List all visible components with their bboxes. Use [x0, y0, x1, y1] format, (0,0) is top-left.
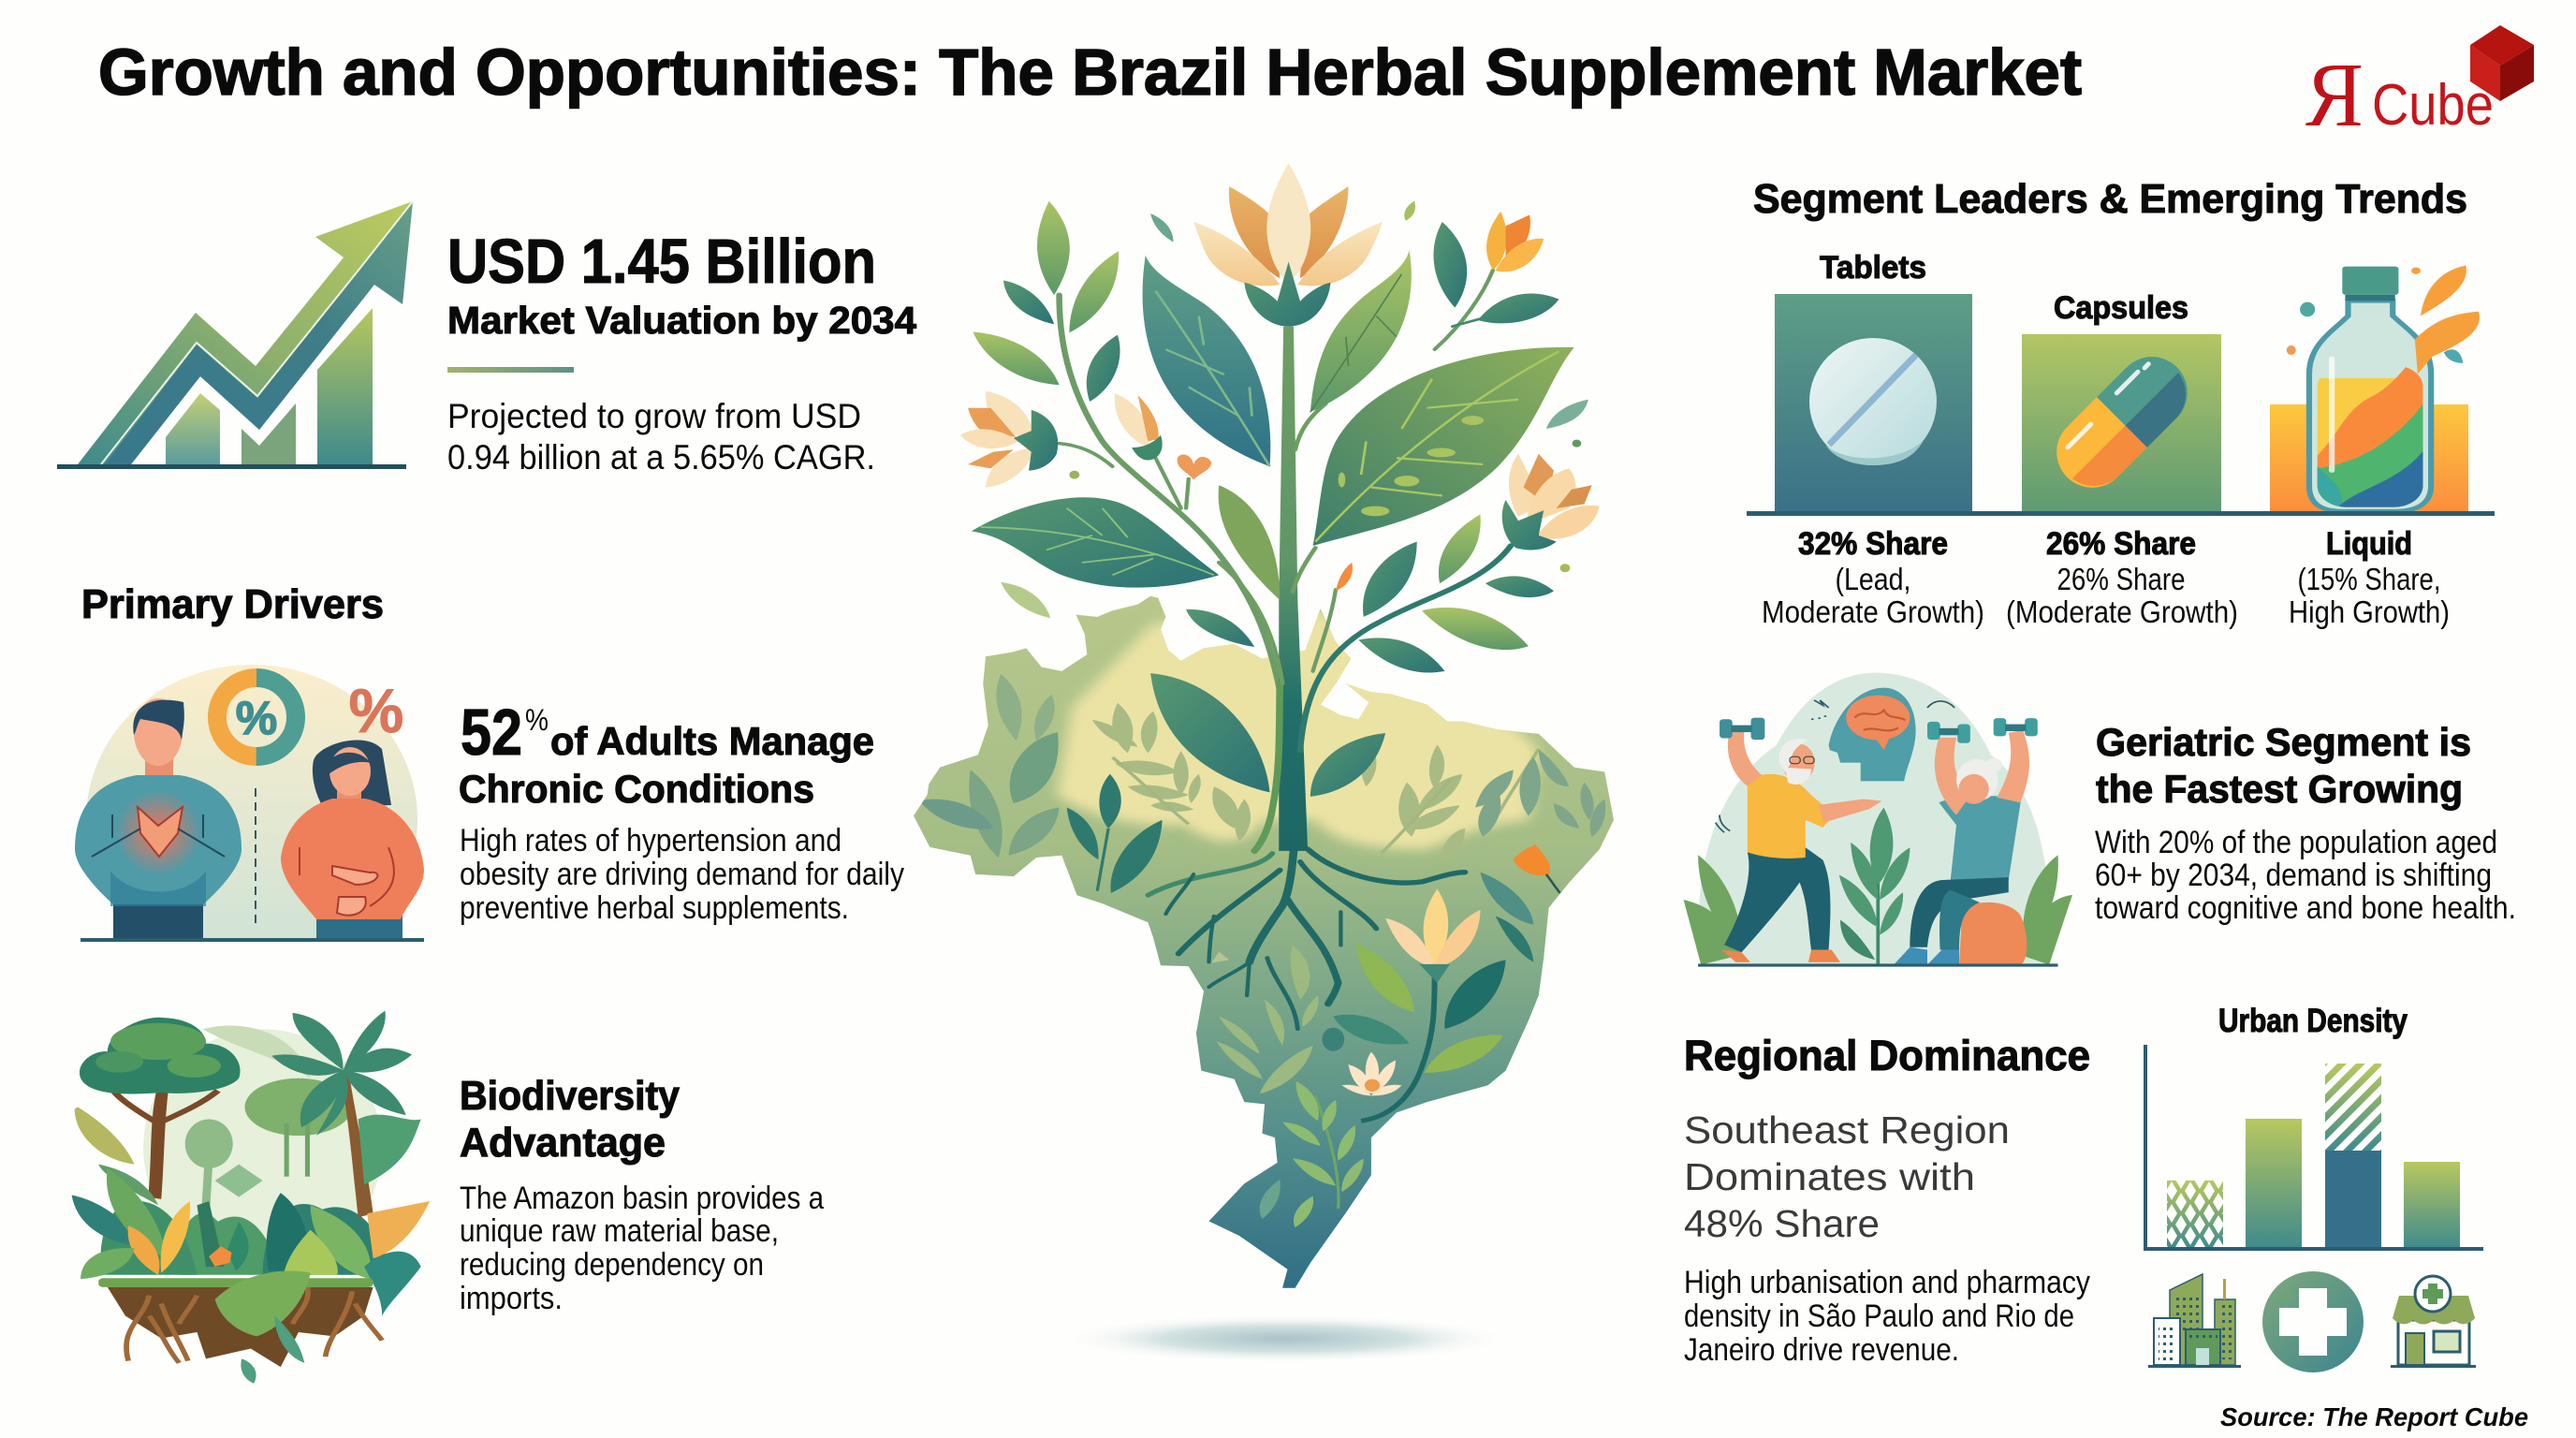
- right flower: [1502, 454, 1600, 550]
- label: liquid share: Liquid: [2326, 526, 2412, 562]
- icon: growth arrow chart: [57, 201, 413, 469]
- logo: RCube: Я: [2305, 45, 2364, 146]
- text: regional dominance: High urbanisation and pharmacy: [1684, 1265, 2090, 1300]
- label: tablets share: [1762, 526, 1984, 629]
- text: biodiversity advantage driver: [460, 1073, 824, 1316]
- map outline highlight in yellow gap: [1321, 683, 1368, 719]
- text: chronic conditions driver: High rates of hypertension and: [460, 823, 842, 858]
- icon: city buildings: [2148, 1274, 2241, 1368]
- plant leaves: [972, 201, 1588, 797]
- market valuation text block: [447, 227, 916, 477]
- label: capsules share: 26% Share: [2046, 526, 2196, 562]
- bar: tablets: Tablets: [1820, 250, 1926, 286]
- text: biodiversity advantage driver: Biodiversity: [460, 1073, 680, 1119]
- text: biodiversity advantage driver: imports.: [460, 1281, 563, 1316]
- market valuation text block: USD 1.45 Billion: [447, 227, 876, 297]
- heading: primary drivers: Primary Drivers: [81, 581, 384, 627]
- text: chronic conditions driver: of Adults Manage: [550, 719, 874, 763]
- text: regional dominance: Southeast Region: [1684, 1108, 2010, 1152]
- label: capsules share: (Moderate Growth): [2006, 594, 2238, 629]
- text: chronic conditions driver: obesity are driving demand for daily: [460, 857, 904, 892]
- text: biodiversity advantage driver: Advantage: [460, 1120, 666, 1166]
- market valuation text block: Market Valuation by 2034: [447, 299, 916, 342]
- icon: adults with chronic conditions: %: [349, 676, 403, 745]
- text: regional dominance: density in São Paulo and Rio de: [1684, 1299, 2074, 1334]
- text: geriatric segment: [2095, 720, 2516, 926]
- text: geriatric segment: 60+ by 2034, demand is shifting: [2095, 858, 2492, 893]
- text: geriatric segment: the Fastest Growing: [2096, 767, 2463, 811]
- logo: RCube: Cube: [2372, 73, 2494, 138]
- market valuation text block: 0.94 billion at a 5.65% CAGR.: [447, 438, 875, 477]
- chart: urban density: [2145, 1003, 2483, 1249]
- plant stems: [1060, 270, 1511, 851]
- icon: medical cross: [2262, 1271, 2364, 1372]
- text: regional dominance: 48% Share: [1684, 1202, 1880, 1245]
- logo: RCube: [2305, 25, 2534, 146]
- icon: adults with chronic conditions: %: [236, 692, 277, 744]
- bar: capsules: [2022, 290, 2221, 513]
- icon: seniors exercising: [1684, 673, 2072, 967]
- segment chart baseline: [1747, 511, 2495, 516]
- text: biodiversity advantage driver: unique raw material base,: [460, 1213, 779, 1249]
- southern sprig: [1315, 1095, 1339, 1209]
- lower flower plant: [1361, 971, 1435, 1121]
- label: liquid share: (15% Share,: [2297, 562, 2441, 596]
- text: biodiversity advantage driver: The Amazon basin provides a: [460, 1181, 824, 1216]
- orange tulip top right: [1486, 212, 1544, 271]
- chart: urban density: Urban Density: [2218, 1003, 2408, 1039]
- text: regional dominance: [1684, 1032, 2090, 1368]
- label: tablets share: Moderate Growth): [1762, 594, 1984, 629]
- label: capsules share: 26% Share: [2057, 562, 2185, 596]
- market valuation text block: Projected to grow from USD: [447, 397, 861, 435]
- text: geriatric segment: Geriatric Segment is: [2096, 720, 2471, 764]
- text: chronic conditions driver: %: [525, 703, 549, 737]
- bar: capsules: Capsules: [2054, 290, 2188, 326]
- text: regional dominance: Dominates with: [1684, 1155, 1975, 1198]
- icon: pharmacy store: [2391, 1276, 2476, 1368]
- roots: [1148, 832, 1465, 1029]
- bar: liquid with bottle: [2270, 266, 2480, 513]
- text: chronic conditions driver: [459, 696, 904, 926]
- label: capsules share: [2006, 526, 2238, 629]
- bar: tablets: [1775, 250, 1972, 513]
- left flower: [960, 391, 1163, 488]
- text: regional dominance: Regional Dominance: [1684, 1032, 2090, 1079]
- brazil map silhouette: [914, 595, 1614, 1288]
- small cream flower: [1341, 1052, 1401, 1095]
- text: biodiversity advantage driver: reducing dependency on: [460, 1247, 764, 1283]
- orange flower: [1514, 844, 1550, 875]
- title: Growth and Opportunities: The Brazil Herbal Supplement Market: [98, 36, 2082, 109]
- icon: amazon rainforest: [72, 1011, 430, 1384]
- map shadow: [1061, 1314, 1510, 1363]
- label: tablets share: 32% Share: [1798, 526, 1948, 562]
- text: chronic conditions driver: 52: [461, 696, 522, 769]
- label: liquid share: [2289, 526, 2450, 629]
- label: liquid share: High Growth): [2289, 594, 2450, 629]
- text: regional dominance: Janeiro drive revenue.: [1684, 1332, 1959, 1368]
- text: chronic conditions driver: preventive herbal supplements.: [460, 890, 849, 926]
- source note: Source: The Report Cube: [2220, 1402, 2528, 1431]
- label: tablets share: (Lead,: [1835, 562, 1911, 596]
- top flower: [1193, 164, 1383, 327]
- icon: adults with chronic conditions: [75, 665, 424, 942]
- heading: segment leaders: Segment Leaders & Emerging Trends: [1753, 176, 2467, 222]
- text: geriatric segment: toward cognitive and bone health.: [2095, 890, 2516, 926]
- illustration: brazil map with herbal plant: [889, 164, 1650, 1299]
- text: chronic conditions driver: Chronic Conditions: [459, 767, 814, 811]
- text: geriatric segment: With 20% of the population aged: [2095, 825, 2497, 860]
